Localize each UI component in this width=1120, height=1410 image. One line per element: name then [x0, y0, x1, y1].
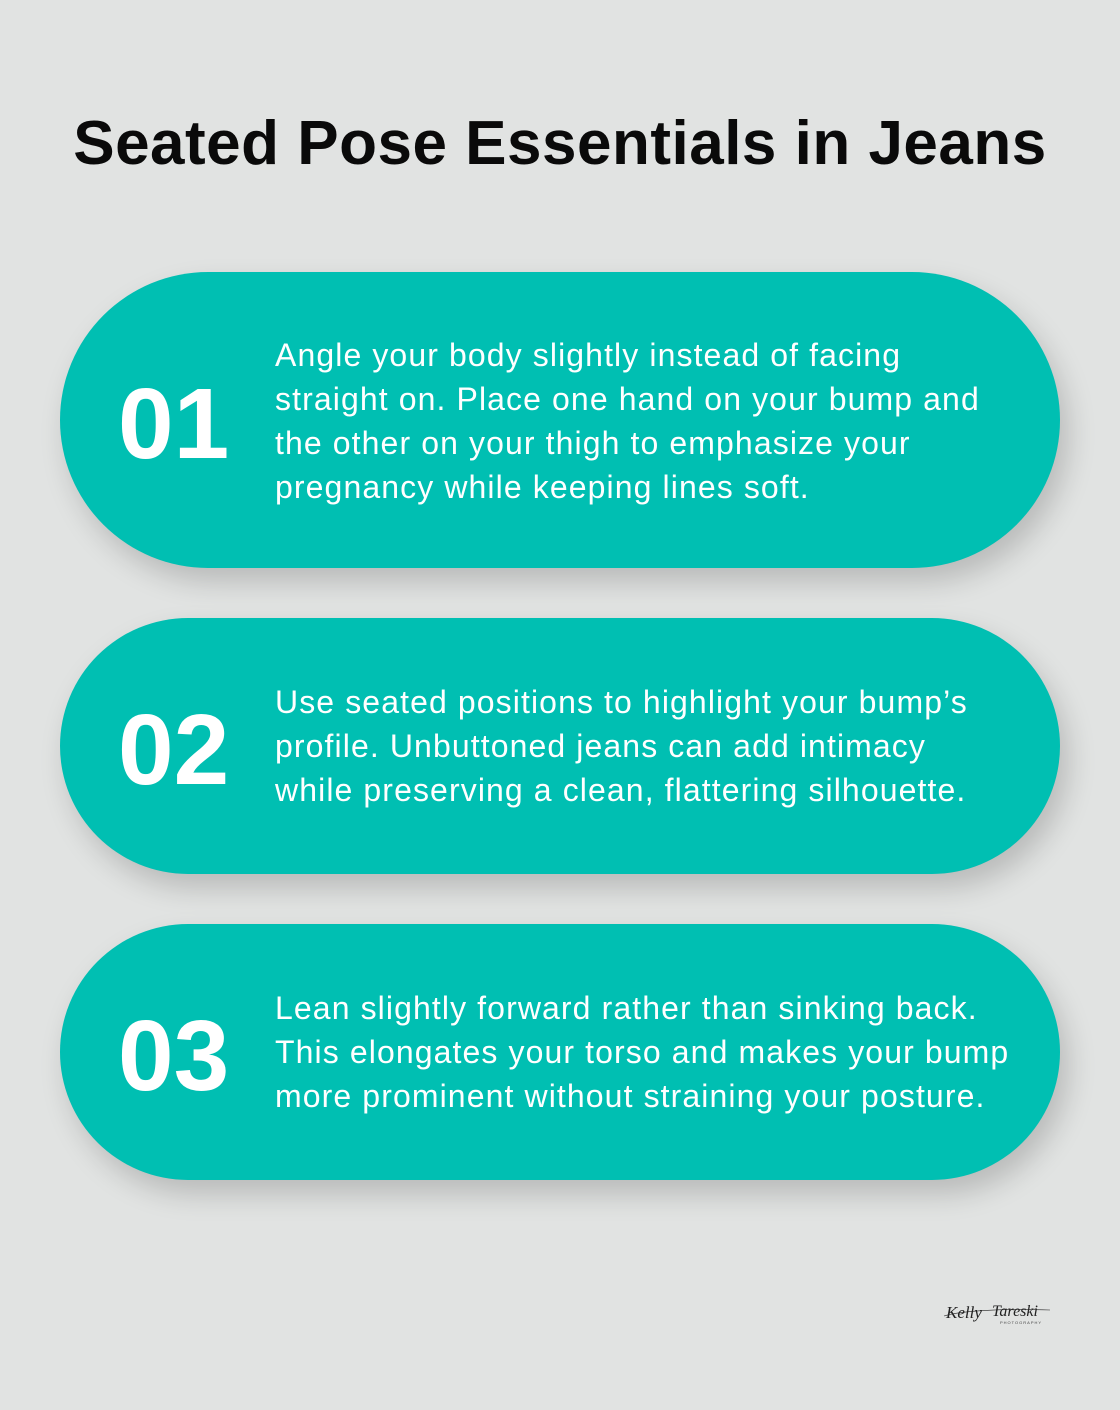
panel: step 01 — [60, 272, 1060, 568]
text 01: straight on. Place one hand on your bump and — [275, 381, 980, 417]
number 03: 03 — [118, 1000, 229, 1112]
logo signature: Kelly — [945, 1303, 982, 1322]
text 01: pregnancy while keeping lines soft. — [275, 469, 810, 505]
text 01: Angle your body slightly instead of facing — [275, 337, 901, 373]
logo signature: Tareski — [992, 1303, 1038, 1320]
text 03: more prominent without straining your posture. — [275, 1078, 985, 1114]
text 03: Lean slightly forward rather than sinking back. — [275, 990, 978, 1026]
logo signature: PHOTOGRAPHY — [1000, 1320, 1042, 1325]
text 02: profile. Unbuttoned jeans can add intimacy — [275, 728, 926, 764]
logo signature — [944, 1303, 1050, 1325]
text 01: the other on your thigh to emphasize your — [275, 425, 911, 461]
text 01 — [275, 337, 980, 505]
number 02: 02 — [118, 694, 229, 806]
panel: step 02 — [60, 618, 1060, 874]
text 02 — [275, 684, 968, 808]
number 01: 01 — [118, 368, 229, 480]
panel: step 03 — [60, 924, 1060, 1180]
text 03 — [275, 990, 1009, 1114]
text 03: This elongates your torso and makes your bump — [275, 1034, 1009, 1070]
text 02: while preserving a clean, flattering silhouette. — [275, 772, 966, 808]
title: Seated Pose Essentials in Jeans — [73, 109, 1047, 178]
text 02: Use seated positions to highlight your bump’s — [275, 684, 968, 720]
